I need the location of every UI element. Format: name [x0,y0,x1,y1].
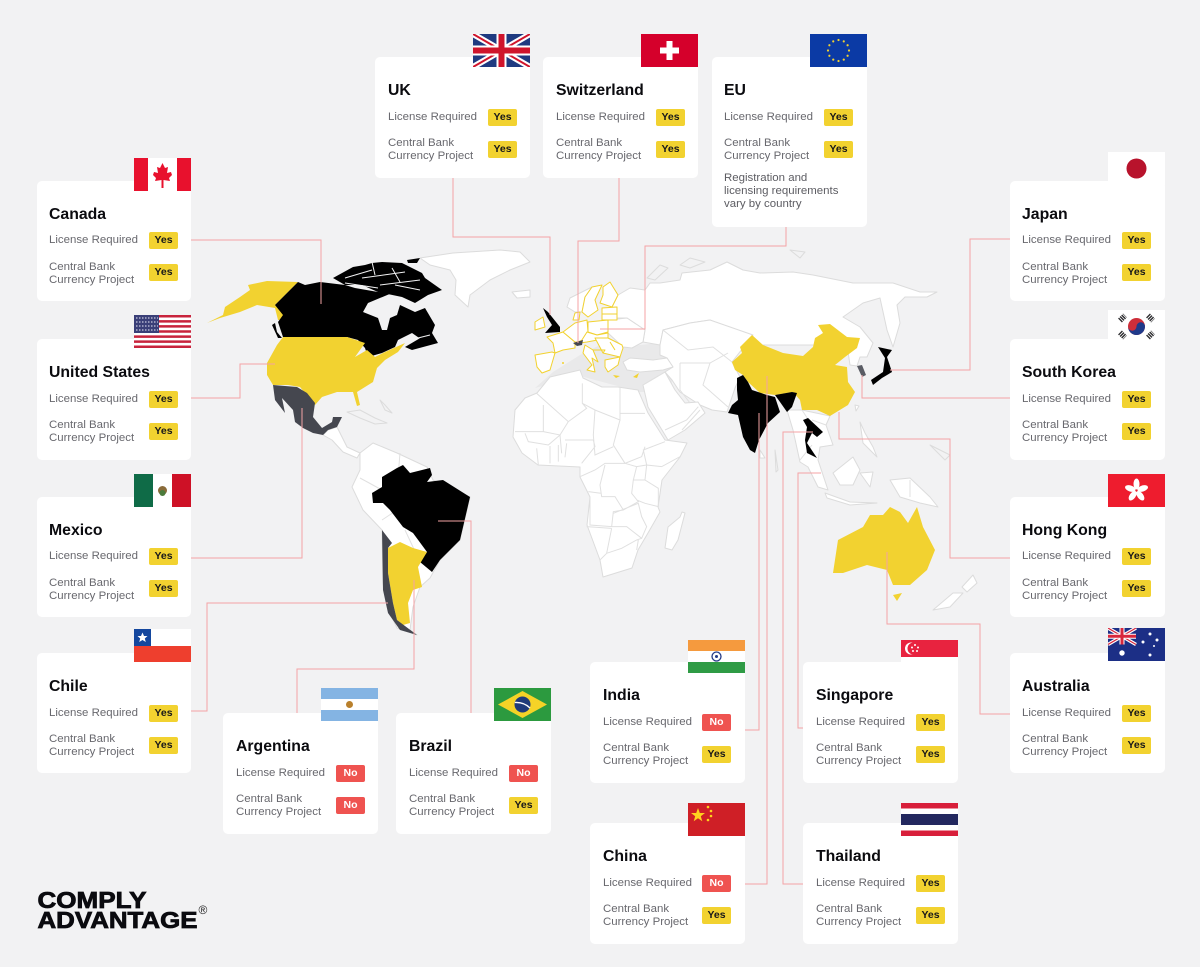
China [732,324,860,416]
card: China: China [603,848,647,865]
card: EU: Central Bank [724,137,790,149]
regulated countries [207,258,935,635]
flag: Argentina [321,688,378,721]
Alaska [207,281,298,323]
card: Canada [37,158,191,301]
card: Chile: Yes [154,739,173,751]
card: India: India [603,687,640,704]
card: Australia: Currency Project [1022,746,1107,758]
card: Mexico: Yes [154,582,173,594]
card: EU [712,34,867,227]
card: Singapore: Yes [921,716,940,728]
Argentina [388,542,427,625]
card: UK: Currency Project [388,150,473,162]
card: India [590,640,745,783]
card: Australia: Central Bank [1022,733,1088,745]
flag: Canada [134,158,191,191]
flag: Mexico [134,474,191,507]
card: Brazil: License Required [409,767,498,779]
card: Japan: Currency Project [1022,274,1107,286]
card: Mexico: Currency Project [49,590,134,602]
card: China [590,803,745,944]
Arctic channels [345,262,430,340]
card: Australia [1010,628,1165,773]
card: Argentina: Central Bank [236,793,302,805]
EU note: Registration and [724,172,807,184]
card: South Korea [1010,310,1165,460]
card: Mexico: Mexico [49,522,103,539]
card: United States [37,315,191,460]
flag: Japan [1108,152,1165,184]
logo: Comply Advantage [38,887,208,933]
card: China: Yes [707,909,726,921]
Australia [833,507,935,601]
card: UK [375,34,530,178]
connector lines [191,178,1010,884]
card: Switzerland: Yes [661,111,680,123]
small islands [347,250,950,472]
card: India: Central Bank [603,742,669,754]
card: United States: Central Bank [49,419,115,431]
EU note: licensing requirements [724,185,838,197]
card: UK: License Required [388,111,477,123]
United States [267,337,405,406]
card: India: No [710,716,724,728]
card: Singapore: Singapore [816,687,893,704]
card: Chile: Currency Project [49,746,134,758]
flag: Australia [1108,628,1165,661]
flag: EU [810,34,867,67]
card: Mexico: License Required [49,550,138,562]
card: Hong Kong: Yes [1127,550,1146,562]
card: Thailand: Thailand [816,848,881,865]
card: UK: UK [388,82,411,99]
card: Brazil: Currency Project [409,806,494,818]
card: Japan: Yes [1127,266,1146,278]
card: Thailand [803,803,958,944]
card: Argentina [223,688,378,834]
card: South Korea: Yes [1127,393,1146,405]
card: United States: Yes [154,393,173,405]
card: Argentina: Currency Project [236,806,321,818]
card: China: License Required [603,877,692,889]
card: China: Currency Project [603,916,688,928]
card: Japan: Japan [1022,206,1068,223]
flag: Thailand [901,803,958,836]
registered mark: ® [198,903,208,917]
card: Switzerland: License Required [556,111,645,123]
card: EU: License Required [724,111,813,123]
card: Canada: Currency Project [49,274,134,286]
card: Switzerland: Central Bank [556,137,622,149]
card: Argentina: No [344,767,358,779]
flag: South Korea [1108,310,1165,342]
card: Canada: Central Bank [49,261,115,273]
card: South Korea: Yes [1127,425,1146,437]
card: Canada: License Required [49,234,138,246]
flag: China [688,803,745,836]
card: Canada: Canada [49,206,106,223]
card: China: No [710,877,724,889]
card: UK: Central Bank [388,137,454,149]
card: Brazil: No [516,767,530,779]
card: India: License Required [603,716,692,728]
card: South Korea: Currency Project [1022,432,1107,444]
inland seas [535,342,680,392]
card: China: Central Bank [603,903,669,915]
card: United States: License Required [49,393,138,405]
logo wordmark: COMPLY [38,887,146,913]
card: Singapore: Central Bank [816,742,882,754]
Switzerland [573,340,583,346]
flag: India [688,640,745,673]
card: Canada: Yes [154,266,173,278]
card: Switzerland [543,34,698,178]
Canada [272,258,442,357]
card: Argentina: License Required [236,767,325,779]
card: Thailand: Central Bank [816,903,882,915]
card: Chile [37,629,191,773]
card: Hong Kong: Yes [1127,582,1146,594]
card: EU: Yes [829,111,848,123]
card: Japan: Central Bank [1022,261,1088,273]
card: EU: EU [724,82,746,99]
flag: Singapore [901,640,958,666]
EU note [724,172,838,210]
card: Canada: Yes [154,234,173,246]
card: Singapore: Currency Project [816,755,901,767]
card: Hong Kong: Central Bank [1022,577,1088,589]
card: Australia: Yes [1127,707,1146,719]
Chile [382,530,417,635]
card: Japan [1010,152,1165,301]
card: UK: Yes [493,143,512,155]
card: United States: Currency Project [49,432,134,444]
card: Chile: Yes [154,707,173,719]
United Kingdom [543,308,560,333]
card: Chile: License Required [49,707,138,719]
card: Hong Kong: Hong Kong [1022,522,1107,539]
card: Mexico: Yes [154,550,173,562]
card: EU: Currency Project [724,150,809,162]
card: Thailand: Currency Project [816,916,901,928]
flag: Chile [134,629,191,662]
South Korea [857,365,866,377]
card: South Korea: License Required [1022,393,1111,405]
card: Hong Kong: License Required [1022,550,1111,562]
card: Hong Kong: Currency Project [1022,590,1107,602]
logo wordmark: ADVANTAGE [38,907,198,933]
flag: Switzerland [641,34,698,67]
card: UK: Yes [493,111,512,123]
card: Switzerland: Switzerland [556,82,644,99]
country borders: Africa [515,383,698,560]
India [728,375,797,453]
card: Mexico: Central Bank [49,577,115,589]
Mexico [273,385,342,435]
card: Australia: License Required [1022,707,1111,719]
card: Chile: Central Bank [49,733,115,745]
card: Thailand: Yes [921,909,940,921]
card: Japan: Yes [1127,234,1146,246]
card: Switzerland: Yes [661,143,680,155]
Brazil [372,465,470,572]
card: Australia: Yes [1127,739,1146,751]
flag: UK [473,34,530,67]
flag: Brazil [494,688,551,721]
card: Argentina: Argentina [236,738,310,755]
card: South Korea: Central Bank [1022,419,1088,431]
card: Brazil: Central Bank [409,793,475,805]
card: Singapore [803,640,958,783]
country borders: Asia and Americas [360,330,910,562]
Thailand [803,418,823,458]
logo wordmark [38,887,198,933]
card: Argentina: No [344,799,358,811]
card: India: Currency Project [603,755,688,767]
card: United States: United States [49,364,150,381]
EU members [535,282,623,373]
card: Japan: License Required [1022,234,1111,246]
card: Brazil: Yes [514,799,533,811]
card: Australia: Australia [1022,678,1090,695]
flag: Hong Kong [1108,474,1165,507]
card: EU: Yes [829,143,848,155]
card: South Korea: South Korea [1022,364,1116,381]
card: Singapore: License Required [816,716,905,728]
card: United States: Yes [154,425,173,437]
card: Hong Kong [1010,474,1165,617]
card: India: Yes [707,748,726,760]
card: Chile: Chile [49,678,88,695]
card: Singapore: Yes [921,748,940,760]
card: Thailand: License Required [816,877,905,889]
card: Thailand: Yes [921,877,940,889]
card: Mexico [37,474,191,617]
card: Brazil [396,688,551,834]
EU note: vary by country [724,198,802,210]
unregulated land masses [323,250,977,635]
card: Brazil: Brazil [409,738,452,755]
Japan [871,347,892,385]
flag: United States [134,315,191,348]
card: Switzerland: Currency Project [556,150,641,162]
